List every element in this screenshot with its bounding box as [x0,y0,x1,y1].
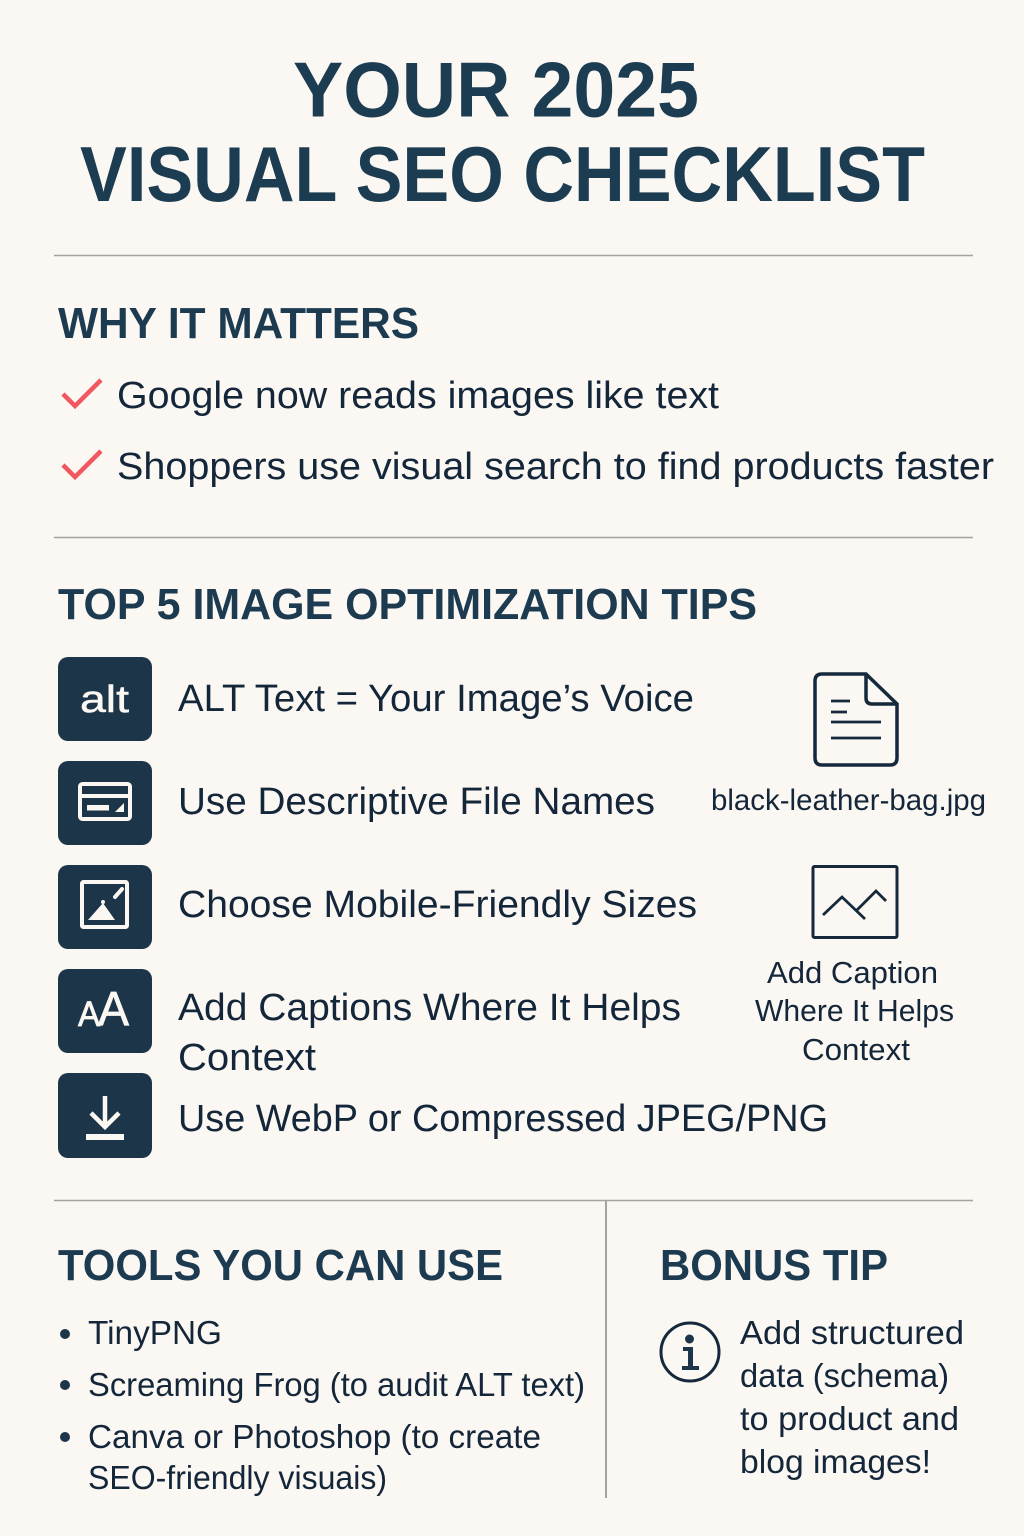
icon: alt [58,657,152,741]
heading: tools: TOOLS YOU CAN USE [58,1241,503,1290]
text: bonus tip: to product and [740,1400,959,1437]
icon: info [661,1323,719,1381]
icon: alt: alt [80,679,130,721]
heading: why it matters: WHY IT MATTERS [58,299,419,348]
text: file name example: black-leather-bag.jpg [711,784,986,817]
icon: image placeholder [813,866,897,938]
panel: tools you can use [58,1241,585,1496]
list: tools: Screaming Frog (to audit ALT text) [88,1366,585,1403]
title: VISUAL SEO CHECKLIST [80,132,925,218]
text: caption example: Where It Helps [755,994,954,1028]
text: tip 5: Use WebP or Compressed JPEG/PNG [178,1098,828,1140]
icon: document [815,674,897,765]
list: tools: TinyPNG [88,1314,222,1351]
icon: letter sizes: A [78,995,101,1034]
text: tip 4 [178,987,681,1079]
text: tip 3: Choose Mobile-Friendly Sizes [178,884,697,926]
text: tip 1: ALT Text = Your Image’s Voice [178,678,694,720]
text: caption example [755,956,954,1067]
icon: file card [58,761,152,845]
text: tip 2: Use Descriptive File Names [178,781,655,823]
text: tip 4: Context [178,1037,316,1079]
text: google reads images: Google now reads images like text [117,375,719,417]
icon: red check 2 [63,451,101,477]
heading: top 5 tips: TOP 5 IMAGE OPTIMIZATION TIPS [58,580,757,629]
text: caption example: Context [802,1033,911,1067]
text: visual search: Shoppers use visual search to find products faster [117,446,994,488]
text: bonus tip: Add structured [740,1314,964,1351]
text: bonus tip: blog images! [740,1443,931,1480]
icon: resize image [58,865,152,949]
text: bonus tip [740,1314,964,1480]
icon: red check 1 [63,380,101,406]
title [80,48,925,218]
heading: bonus tip: BONUS TIP [660,1241,888,1290]
list: tools: SEO-friendly visuais) [88,1459,387,1496]
panel: bonus tip [660,1241,964,1480]
list: tools: Canva or Photoshop (to create [88,1418,541,1455]
icon: letter sizes [58,969,152,1053]
text: tip 4: Add Captions Where It Helps [178,987,681,1029]
panel: why it matters [58,299,994,488]
panel: top 5 tips [58,580,986,1158]
list: tools [60,1314,585,1496]
icon: download [58,1073,152,1158]
title: YOUR 2025 [293,48,699,134]
icon: letter sizes: A [98,983,129,1036]
text: bonus tip: data (schema) [740,1357,949,1394]
text: caption example: Add Caption [767,956,938,990]
